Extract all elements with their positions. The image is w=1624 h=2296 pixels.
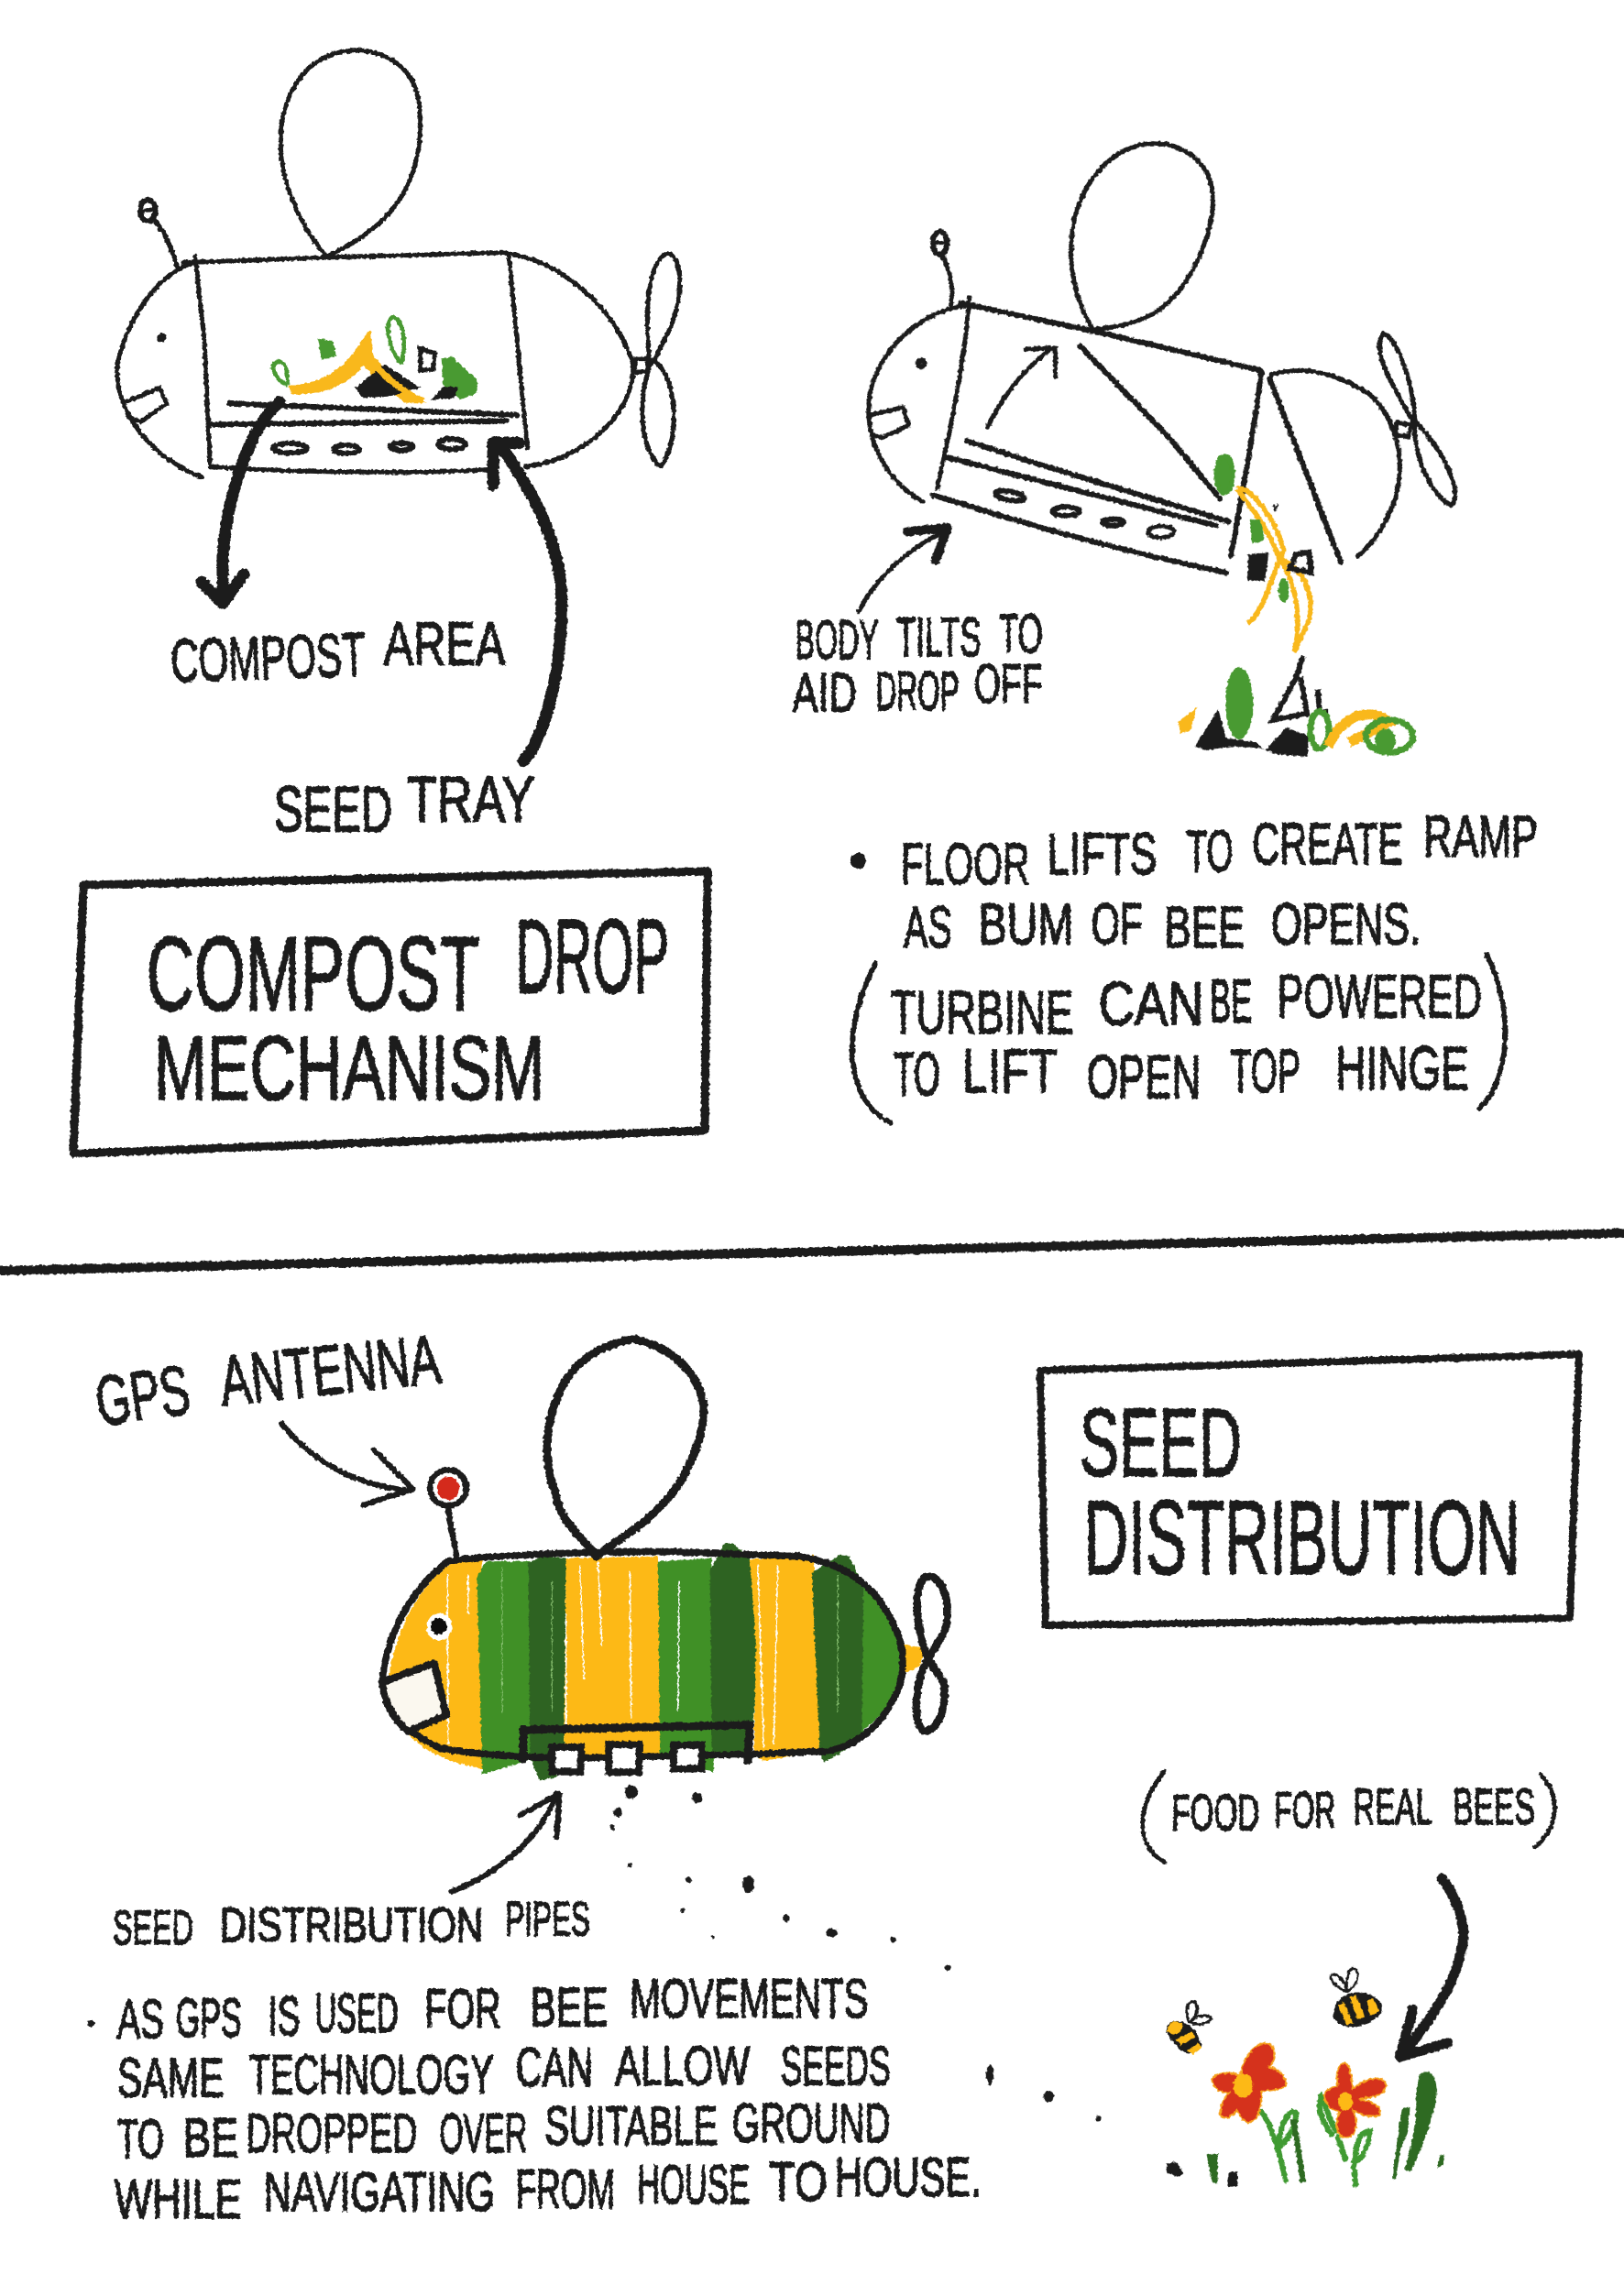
- flower left: [1213, 2043, 1286, 2122]
- text: floor lifts note: OF: [1092, 891, 1142, 957]
- label: seed distribution pipes: SEED: [113, 1901, 193, 1955]
- heading: compost drop mechanism: DROP: [515, 898, 669, 1015]
- compost pile on the ground: [1178, 656, 1412, 757]
- text: turbine note in brackets: LIFT: [962, 1037, 1058, 1106]
- label: gps antenna: [91, 1320, 444, 1441]
- label: body tilts to aid drop off: DROP: [876, 660, 960, 722]
- label: seed distribution pipes: DISTRIBUTION: [220, 1898, 483, 1952]
- label: food for real bees: REAL: [1354, 1777, 1432, 1835]
- text: floor lifts note: CREATE: [1252, 811, 1403, 877]
- seed pipes: [552, 1744, 701, 1772]
- text: turbine note in brackets: TO: [894, 1040, 940, 1109]
- label: food for real bees: FOOD: [1171, 1784, 1259, 1842]
- text: gps seed dropping note: FROM: [515, 2158, 615, 2220]
- arrow: to compost area: [202, 402, 280, 604]
- text: floor lifts note: BEE: [1164, 894, 1245, 960]
- bee outline: [117, 50, 680, 477]
- label: body tilts to aid drop off: TO: [999, 603, 1043, 665]
- label: seed tray: [274, 762, 534, 846]
- divider line: [0, 1233, 1624, 1271]
- arrow head: [907, 528, 948, 561]
- label: body tilts to aid drop off: TILTS: [896, 606, 982, 668]
- illustration: coloured seed distribution bee: [382, 1339, 948, 1780]
- text: gps seed dropping note: CAN: [515, 2036, 593, 2098]
- text: floor lifts note: BUM: [978, 891, 1073, 957]
- text: gps seed dropping note: BE: [183, 2106, 238, 2169]
- text: gps seed dropping note: TO: [117, 2107, 164, 2170]
- text: turbine note in brackets: BE: [1210, 967, 1252, 1035]
- text: gps seed dropping note: HOUSE: [637, 2153, 750, 2215]
- label: food for real bees: FOR: [1274, 1780, 1335, 1838]
- label: seed tray: SEED: [274, 773, 392, 846]
- label: compost area: AREA: [384, 609, 505, 678]
- text: gps seed dropping note: ALLOW: [615, 2035, 751, 2097]
- box: compost drop heading frame: [73, 871, 708, 1153]
- compost pile: [273, 317, 477, 402]
- text: gps seed dropping note: WHILE: [115, 2168, 242, 2230]
- flowers and real bees: [1167, 1878, 1464, 2187]
- text: floor lifts note: RAMP: [1423, 804, 1538, 869]
- illustration: bee with compost area and seed tray: [117, 50, 680, 761]
- propeller: [916, 1576, 948, 1732]
- antenna: [430, 1470, 466, 1557]
- eye: [426, 1613, 452, 1641]
- arrow: to seed pipes: [451, 1794, 559, 1892]
- text: gps seed dropping note: AS: [117, 1987, 164, 2050]
- label: seed distribution pipes: [113, 1893, 590, 1955]
- text: gps seed dropping note: IS: [268, 1984, 301, 2047]
- arrow: to food for bees: [1400, 1878, 1464, 2057]
- dark leaves: [1207, 2072, 1444, 2183]
- heading: compost drop mechanism: MECHANISM: [154, 1017, 544, 1119]
- text: gps seed dropping note: USED: [315, 1982, 399, 2044]
- label: body tilts to aid drop off: OFF: [974, 652, 1043, 715]
- text: gps seed dropping note: DROPPED: [246, 2102, 417, 2164]
- arrow: body tilts: [859, 530, 948, 611]
- text: gps seed dropping note: GPS: [176, 1986, 242, 2049]
- text: gps seed dropping note: SUITABLE: [544, 2094, 718, 2157]
- text: floor lifts note: TO: [1186, 818, 1234, 884]
- label: food for real bees: BEES: [1453, 1777, 1535, 1835]
- label: body tilts to aid drop off: BODY: [796, 608, 879, 671]
- heading: compost drop mechanism: [147, 898, 669, 1119]
- text: gps seed dropping note: SAME: [117, 2046, 224, 2108]
- flower right: [1324, 2062, 1386, 2137]
- heading: compost drop mechanism: COMPOST: [147, 916, 480, 1033]
- falling compost: [1216, 456, 1311, 652]
- label: body tilts to aid drop off: AID: [793, 661, 857, 724]
- label: seed distribution pipes: PIPES: [505, 1893, 590, 1947]
- text: gps seed dropping note: GROUND: [732, 2092, 891, 2154]
- text: gps seed dropping note: TO: [769, 2150, 828, 2213]
- heading: seed distribution: [1080, 1390, 1520, 1597]
- icon: large bee: [1331, 1968, 1382, 2027]
- text: gps seed dropping note: [87, 1967, 982, 2230]
- handwritten text labels: [87, 603, 1554, 2230]
- text: gps seed dropping note: MOVEMENTS: [630, 1967, 869, 2029]
- striped body: [388, 1544, 926, 1780]
- text: turbine note in brackets: TOP: [1230, 1037, 1300, 1106]
- text: floor lifts note: FLOOR: [901, 831, 1029, 897]
- arrow: to gps antenna: [281, 1423, 413, 1505]
- soil crumbs: [1167, 2162, 1238, 2187]
- mouth: [382, 1663, 446, 1732]
- label: gps antenna: GPS: [91, 1351, 194, 1441]
- text: floor lifts note: AS: [904, 894, 952, 960]
- text: floor lifts note: [850, 804, 1538, 960]
- body outline: [382, 1551, 903, 1758]
- heading: seed distribution: SEED: [1080, 1390, 1242, 1497]
- pipe housing: [523, 1725, 750, 1761]
- text: gps seed dropping note: OVER: [439, 2102, 527, 2164]
- icon: eye: [157, 333, 166, 343]
- falling seeds: [609, 1786, 1102, 2122]
- icon: small bee: [1167, 2002, 1212, 2055]
- label: gps antenna: ANTENNA: [216, 1320, 444, 1421]
- stems and leaves: [1262, 2096, 1370, 2185]
- illustration: tilted bee dropping compost: [859, 144, 1455, 757]
- bee outline: [869, 144, 1455, 573]
- text: gps seed dropping note: BEE: [530, 1976, 608, 2039]
- text: gps seed dropping note: HOUSE.: [835, 2146, 982, 2208]
- arrow: to seed tray: [493, 443, 562, 761]
- wing: [547, 1339, 704, 1557]
- text: gps seed dropping note: NAVIGATING: [264, 2160, 495, 2223]
- text: turbine note in brackets: TURBINE: [891, 979, 1073, 1047]
- text: gps seed dropping note: FOR: [424, 1977, 501, 2039]
- text: turbine note in brackets: OPEN: [1087, 1043, 1201, 1111]
- box: seed distribution heading frame: [1040, 1354, 1579, 1625]
- text: floor lifts note: OPENS.: [1271, 891, 1421, 957]
- text: gps seed dropping note: TECHNOLOGY: [249, 2043, 494, 2105]
- label: seed tray: TRAY: [407, 762, 534, 835]
- text: turbine note in brackets: POWERED: [1277, 963, 1482, 1032]
- text: turbine note in brackets: [852, 955, 1505, 1123]
- text: gps seed dropping note: SEEDS: [781, 2035, 891, 2097]
- label: food for real bees: [1142, 1772, 1554, 1863]
- text: floor lifts note: LIFTS: [1048, 821, 1157, 887]
- label: body tilts to aid drop off: [793, 603, 1043, 724]
- label: compost area: COMPOST: [170, 620, 367, 696]
- text: turbine note in brackets: CAN: [1098, 970, 1204, 1039]
- text: turbine note in brackets: HINGE: [1335, 1034, 1469, 1103]
